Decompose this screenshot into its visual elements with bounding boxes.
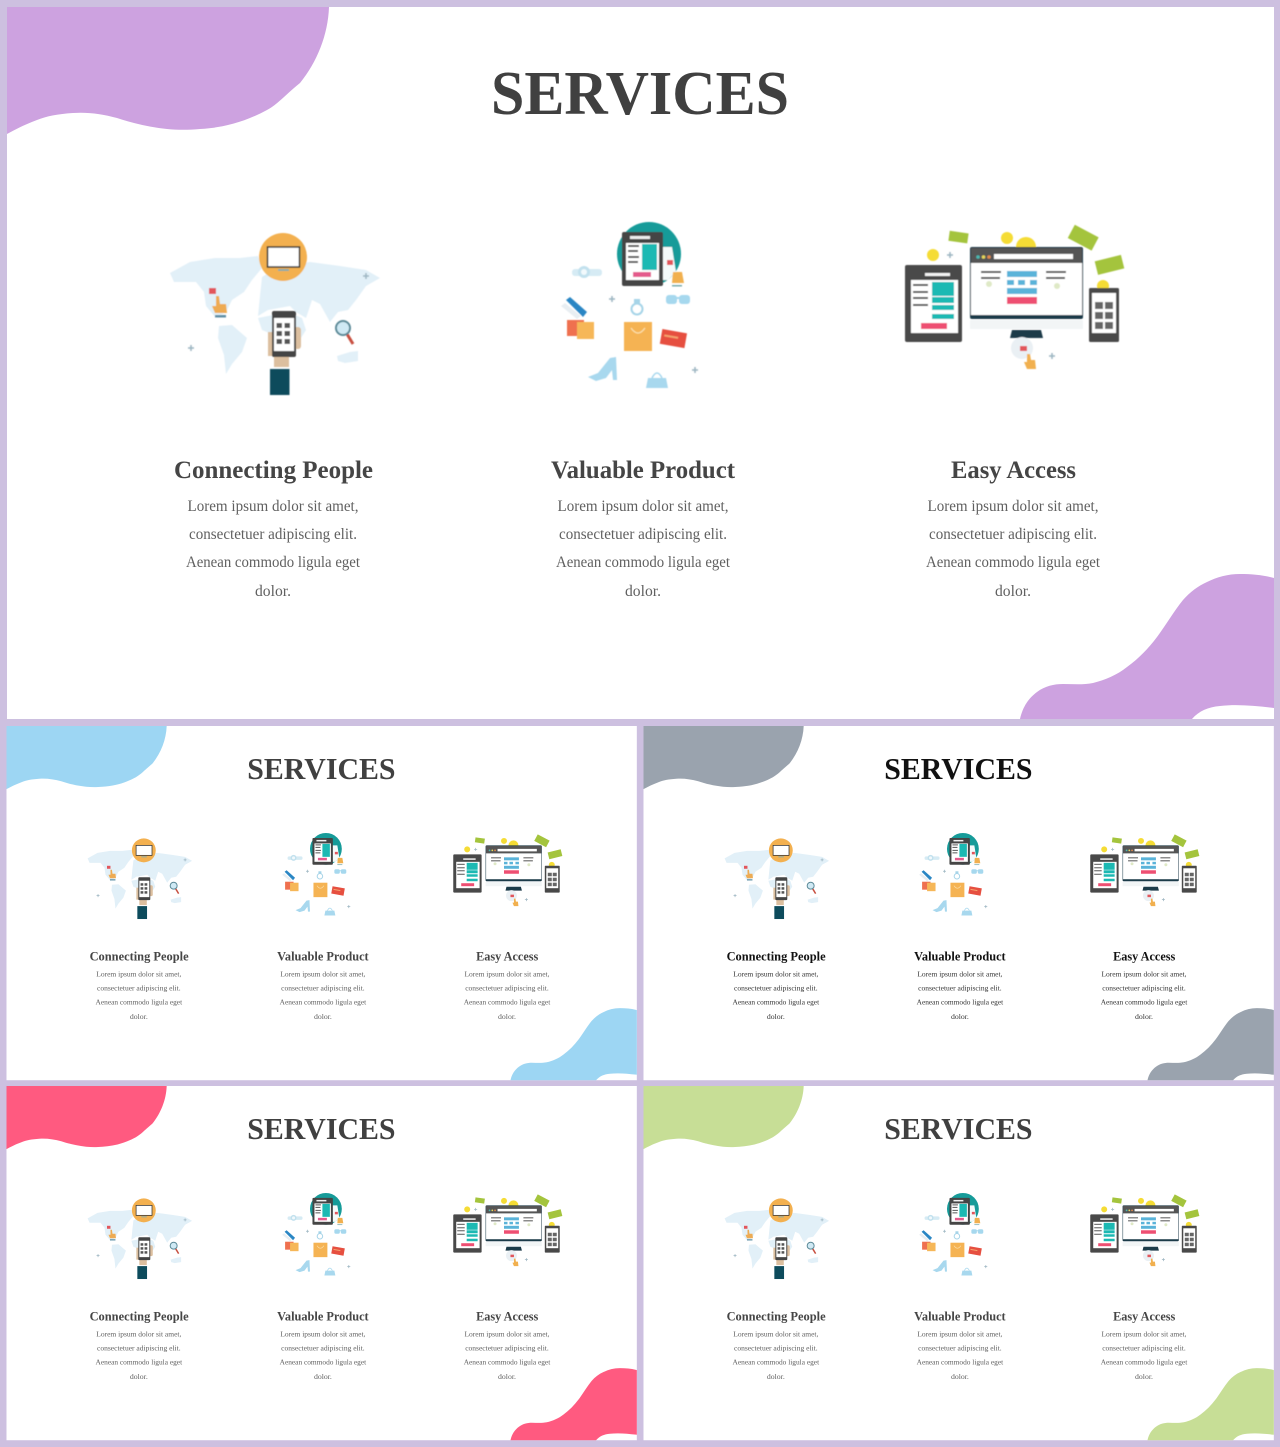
panel: gray slide <box>644 726 1274 1080</box>
title: SERVICES <box>491 60 789 128</box>
panel: large purple slide <box>7 7 1274 719</box>
column: easy access: Easy Access <box>1113 949 1175 963</box>
column: easy access: dolor. <box>498 1372 516 1381</box>
blob: bottom right blue <box>510 1008 637 1080</box>
icon: shopping items <box>561 222 698 388</box>
column: connecting people: consectetuer adipiscing elit. <box>189 526 357 543</box>
column: connecting people: consectetuer adipiscing elit. <box>734 984 818 993</box>
column: easy access: Easy Access <box>476 949 538 963</box>
column: connecting people: Lorem ipsum dolor sit amet, <box>96 1330 181 1339</box>
column: valuable product: Valuable Product <box>277 1309 370 1323</box>
blob: top left purple <box>7 7 329 134</box>
column: connecting people: Lorem ipsum dolor sit amet, <box>733 970 818 979</box>
column: valuable product: Aenean commodo ligula eget <box>280 1358 367 1367</box>
column: easy access: Lorem ipsum dolor sit amet, <box>1101 970 1187 979</box>
column: valuable product: dolor. <box>314 1012 332 1021</box>
column: valuable product: Lorem ipsum dolor sit amet, <box>280 1330 366 1339</box>
column: connecting people <box>90 1309 189 1381</box>
column: connecting people: dolor. <box>767 1012 785 1021</box>
column: connecting people: Lorem ipsum dolor sit amet, <box>96 970 181 979</box>
column: easy access: consectetuer adipiscing elit. <box>1102 1344 1186 1353</box>
column: valuable product: Lorem ipsum dolor sit amet, <box>280 970 366 979</box>
column: valuable product: Lorem ipsum dolor sit amet, <box>558 498 728 515</box>
icon: shopping items <box>919 1193 987 1276</box>
column: connecting people: Lorem ipsum dolor sit amet, <box>188 498 358 515</box>
panel: pink slide <box>6 1086 637 1440</box>
column: connecting people <box>727 1309 826 1381</box>
column: valuable product: consectetuer adipiscing elit. <box>281 984 365 993</box>
column: easy access: consectetuer adipiscing elit. <box>929 526 1097 543</box>
column: valuable product: Valuable Product <box>277 949 370 963</box>
column: easy access: consectetuer adipiscing elit. <box>1102 984 1186 993</box>
blob: bottom right pink <box>510 1368 637 1440</box>
icon: world map with phone <box>725 838 829 919</box>
column: easy access: consectetuer adipiscing elit. <box>465 984 549 993</box>
column: valuable product: consectetuer adipiscing elit. <box>918 1344 1002 1353</box>
column: connecting people: Aenean commodo ligula eget <box>96 998 183 1007</box>
column: connecting people: dolor. <box>130 1372 148 1381</box>
icon: devices and money <box>905 225 1124 369</box>
column: easy access: dolor. <box>995 583 1031 600</box>
column: easy access: Lorem ipsum dolor sit amet, <box>464 1330 550 1339</box>
title: SERVICES <box>884 752 1033 786</box>
blob: bottom right gray <box>1147 1008 1274 1080</box>
column: valuable product: dolor. <box>951 1372 969 1381</box>
icon: world map with phone <box>88 838 192 919</box>
column: easy access: consectetuer adipiscing elit. <box>465 1344 549 1353</box>
column: connecting people: Connecting People <box>727 949 826 963</box>
column: easy access <box>926 457 1101 600</box>
column: valuable product: Aenean commodo ligula eget <box>917 1358 1004 1367</box>
column: easy access: Aenean commodo ligula eget <box>464 1358 551 1367</box>
icon: devices and money <box>453 834 562 906</box>
column: connecting people: Connecting People <box>90 1309 189 1323</box>
column: connecting people: dolor. <box>255 583 291 600</box>
column: connecting people: consectetuer adipiscing elit. <box>97 1344 181 1353</box>
column: connecting people: Aenean commodo ligula eget <box>96 1358 183 1367</box>
icon: world map with phone <box>88 1198 192 1279</box>
icon: devices and money <box>1090 834 1199 906</box>
column: connecting people: Aenean commodo ligula eget <box>186 554 361 571</box>
column: valuable product: dolor. <box>314 1372 332 1381</box>
column: connecting people <box>727 949 826 1021</box>
column: valuable product: Lorem ipsum dolor sit amet, <box>917 970 1003 979</box>
column: valuable product: Valuable Product <box>914 1309 1007 1323</box>
column: easy access: dolor. <box>1135 1012 1153 1021</box>
panel: green slide <box>644 1086 1274 1440</box>
column: connecting people: consectetuer adipiscing elit. <box>734 1344 818 1353</box>
column: easy access: Lorem ipsum dolor sit amet, <box>1101 1330 1187 1339</box>
column: easy access: Easy Access <box>476 1309 538 1323</box>
column: easy access: Aenean commodo ligula eget <box>1101 1358 1188 1367</box>
column: connecting people: Connecting People <box>90 949 189 963</box>
icon: world map with phone <box>170 233 380 395</box>
column: valuable product <box>914 1309 1007 1381</box>
column: valuable product: dolor. <box>625 583 661 600</box>
column: connecting people: Connecting People <box>727 1309 826 1323</box>
column: valuable product: Aenean commodo ligula eget <box>556 554 731 571</box>
column: valuable product: Valuable Product <box>914 949 1007 963</box>
column: connecting people: Aenean commodo ligula eget <box>733 1358 820 1367</box>
column: easy access: Lorem ipsum dolor sit amet, <box>464 970 550 979</box>
column: connecting people: dolor. <box>767 1372 785 1381</box>
column: valuable product: Valuable Product <box>551 457 736 484</box>
column: easy access <box>464 1309 551 1381</box>
icon: devices and money <box>1090 1194 1199 1266</box>
column: easy access: dolor. <box>1135 1372 1153 1381</box>
panel: blue slide <box>6 726 637 1080</box>
column: connecting people: Connecting People <box>174 457 373 484</box>
title: SERVICES <box>247 1112 396 1146</box>
column: valuable product: consectetuer adipiscing elit. <box>559 526 727 543</box>
column: connecting people: Aenean commodo ligula eget <box>733 998 820 1007</box>
column: easy access <box>1101 1309 1188 1381</box>
column: easy access: Aenean commodo ligula eget <box>464 998 551 1007</box>
column: easy access: Aenean commodo ligula eget <box>926 554 1101 571</box>
column: valuable product <box>277 949 370 1021</box>
icon: shopping items <box>282 1193 350 1276</box>
column: easy access: Lorem ipsum dolor sit amet, <box>928 498 1098 515</box>
column: valuable product: Lorem ipsum dolor sit amet, <box>917 1330 1003 1339</box>
icon: devices and money <box>453 1194 562 1266</box>
column: valuable product <box>551 457 736 600</box>
column: valuable product: consectetuer adipiscing elit. <box>918 984 1002 993</box>
icon: shopping items <box>919 833 987 916</box>
column: easy access <box>1101 949 1188 1021</box>
column: valuable product: dolor. <box>951 1012 969 1021</box>
blob: top left pink <box>6 1086 167 1149</box>
icon: shopping items <box>282 833 350 916</box>
column: valuable product: consectetuer adipiscing elit. <box>281 1344 365 1353</box>
column: valuable product: Aenean commodo ligula eget <box>280 998 367 1007</box>
blob: bottom right purple <box>1020 574 1274 719</box>
title: SERVICES <box>884 1112 1033 1146</box>
column: connecting people <box>90 949 189 1021</box>
column: easy access: dolor. <box>498 1012 516 1021</box>
blob: top left blue <box>6 726 167 789</box>
column: valuable product <box>914 949 1007 1021</box>
icon: world map with phone <box>725 1198 829 1279</box>
blob: bottom right green <box>1147 1368 1274 1440</box>
column: valuable product: Aenean commodo ligula eget <box>917 998 1004 1007</box>
column: easy access: Easy Access <box>1113 1309 1175 1323</box>
column: connecting people: Lorem ipsum dolor sit amet, <box>733 1330 818 1339</box>
column: easy access <box>464 949 551 1021</box>
column: connecting people: dolor. <box>130 1012 148 1021</box>
column: easy access: Aenean commodo ligula eget <box>1101 998 1188 1007</box>
column: valuable product <box>277 1309 370 1381</box>
blob: top left green <box>644 1086 804 1149</box>
column: easy access: Easy Access <box>951 457 1076 484</box>
blob: top left gray <box>644 726 804 789</box>
column: connecting people: consectetuer adipiscing elit. <box>97 984 181 993</box>
title: SERVICES <box>247 752 396 786</box>
column: connecting people <box>174 457 373 600</box>
